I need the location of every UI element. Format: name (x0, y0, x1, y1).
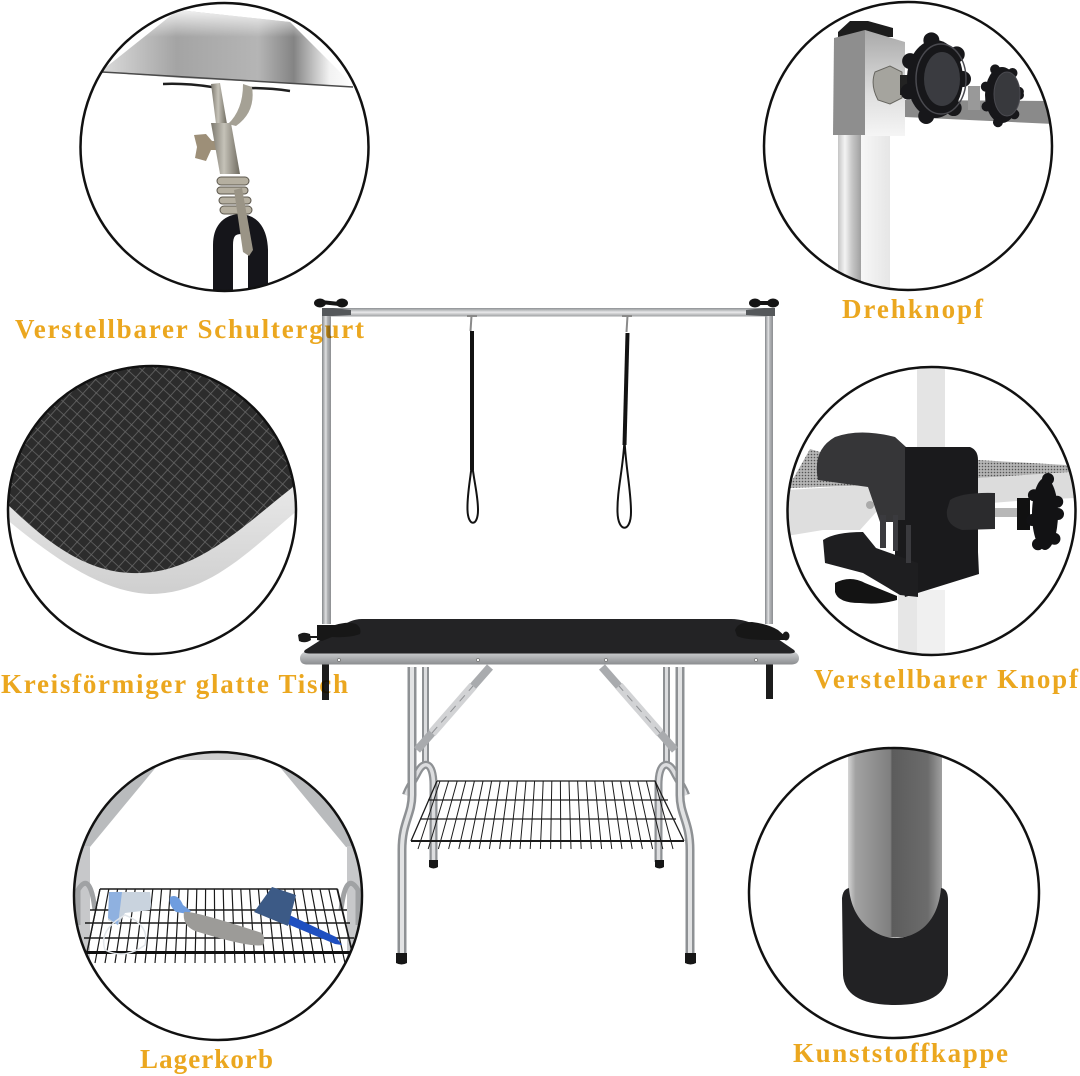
left clamp knob (298, 633, 318, 642)
grooming loop right (617, 316, 632, 528)
bar underside (104, 10, 339, 85)
upright tube right face (861, 135, 890, 290)
rubber feet (396, 860, 696, 964)
table rim (300, 649, 799, 664)
left brace (70, 755, 157, 850)
hook arm (228, 84, 253, 126)
silver band (5, 482, 298, 594)
black table top (304, 619, 795, 654)
slicker brush handle (278, 912, 342, 945)
hook body (211, 123, 240, 174)
metal tube (848, 745, 942, 938)
perforated table top left (790, 449, 858, 488)
sleeve right face (865, 30, 905, 136)
bolt link (968, 86, 980, 110)
upright pole lower right (917, 590, 945, 654)
dryer nozzle (170, 896, 191, 914)
hair dryer (104, 892, 151, 954)
label: Kunststoffkappe: Kunststoffkappe (793, 1038, 1008, 1068)
lower adjuster knob (835, 579, 897, 604)
table edge right (978, 472, 1076, 504)
right upright pole (765, 312, 773, 624)
right brace (279, 755, 366, 850)
upright lower ends (322, 664, 773, 700)
panel: rotary knob detail (764, 2, 1053, 290)
clamp side slots (880, 520, 911, 563)
grooming loop left (467, 316, 478, 523)
small knob (985, 67, 1020, 123)
right clamp (735, 622, 785, 640)
wire storage basket (411, 781, 684, 849)
rear and front legs, right (602, 667, 690, 955)
anti-slip grid surface (0, 360, 300, 573)
clamp top textured arc and side (817, 432, 906, 522)
label: Drehknopf: Drehknopf (842, 294, 984, 324)
label: Verstellbarer Schultergurt: Verstellbarer Schultergurt (15, 314, 364, 344)
upright pole top (917, 368, 945, 447)
grooming table product (298, 298, 799, 964)
horizontal top bar (330, 308, 767, 316)
panel: snap hook detail (80, 3, 368, 292)
horizontal bar (905, 100, 1053, 124)
mounting plate (163, 84, 290, 91)
bracket bolt (866, 501, 874, 509)
black rope loop (223, 224, 258, 292)
panel: plastic cap detail (749, 745, 1039, 1038)
perforated table top right (978, 460, 1070, 478)
tightening knob (1017, 478, 1058, 550)
hook tip (234, 188, 253, 256)
panel: storage basket detail (70, 750, 366, 1040)
large knob (907, 40, 966, 118)
threaded stud (995, 508, 1017, 517)
upright tube left face (838, 135, 861, 290)
left clamp (317, 623, 360, 641)
top bar knobs (314, 298, 779, 308)
hook thumb knob (194, 134, 218, 161)
rim rivets (338, 658, 758, 662)
rear and front legs, left (402, 667, 490, 955)
sleeve left face (833, 30, 865, 135)
knob barrel (947, 493, 995, 530)
top bar corner brackets (322, 308, 775, 316)
left leg (72, 846, 90, 971)
panel: adjustable clamp detail (787, 360, 1076, 665)
bolt (900, 75, 908, 95)
lower jaw (823, 532, 918, 597)
basket rims (84, 889, 354, 952)
left upright pole (322, 310, 331, 624)
slicker brush head (254, 887, 296, 926)
hex nut (873, 66, 902, 104)
panel: textured table surface detail (0, 360, 300, 654)
upright pole lower left (898, 594, 917, 653)
bar top fade (150, 10, 302, 34)
right clamp knob (782, 632, 790, 640)
electric clipper (184, 912, 264, 945)
label: Kreisförmiger glatte Tisch: Kreisförmiger glatte Tisch (1, 669, 348, 699)
right leg (347, 846, 365, 971)
black rubber cap (842, 888, 948, 1005)
hook stem (211, 83, 227, 124)
clamp body (895, 447, 979, 597)
leg arches (78, 883, 358, 925)
label: Lagerkorb: Lagerkorb (140, 1044, 273, 1074)
spring coil (217, 177, 252, 214)
table underside sliver (178, 750, 258, 760)
label: Verstellbarer Knopf: Verstellbarer Knopf (814, 664, 1079, 694)
basket wires (85, 889, 355, 963)
table edge left (787, 485, 878, 536)
black end cap (838, 21, 893, 37)
basket front bar (84, 951, 354, 954)
bar edge (102, 72, 353, 87)
